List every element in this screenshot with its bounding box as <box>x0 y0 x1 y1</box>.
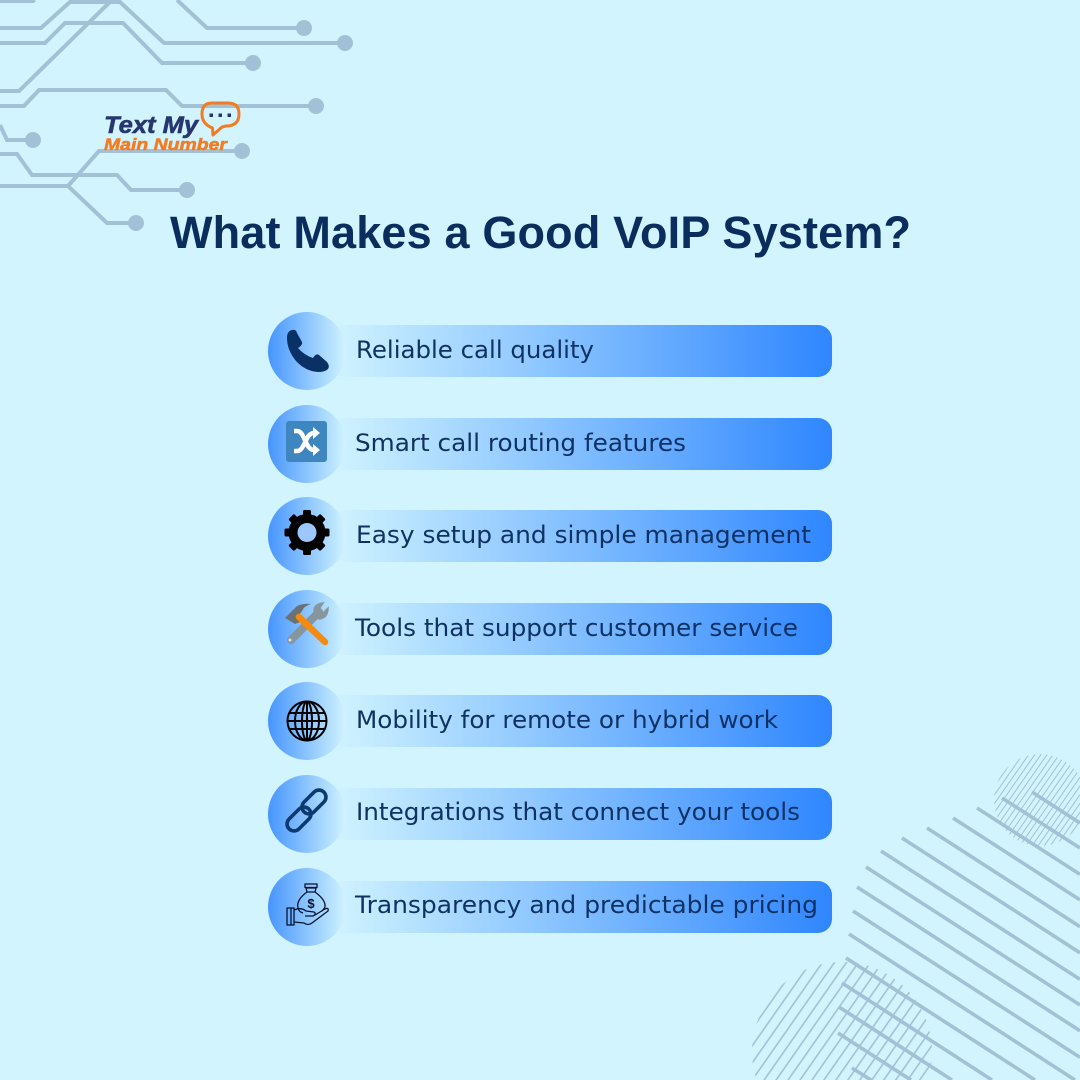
list row: Mobility for remote or hybrid work <box>268 682 832 760</box>
list row: Smart call routing features <box>268 405 832 483</box>
list row: Easy setup and simple management <box>268 497 832 575</box>
icon: phone <box>287 330 329 372</box>
icon: gear <box>284 510 330 555</box>
logo: Text My Main Number: Text My <box>104 112 200 139</box>
icon: shuffle <box>286 421 327 462</box>
list row: Integrations that connect your tools: Integrations that connect your tools <box>356 798 800 826</box>
title: What Makes a Good VoIP System? <box>170 207 911 258</box>
list row: Smart call routing features: Smart call routing features <box>355 429 686 457</box>
logo: Text My Main Number: Main Number <box>104 135 229 154</box>
list row: Mobility for remote or hybrid work: Mobility for remote or hybrid work <box>356 706 778 734</box>
logo: Text My Main Number <box>104 103 239 154</box>
list row: Reliable call quality <box>268 312 832 390</box>
list row: Integrations that connect your tools <box>268 775 832 853</box>
icon: hammer and wrench <box>285 603 328 642</box>
icon: money bag on hand <box>287 884 328 925</box>
list row: Transparency and predictable pricing: Transparency and predictable pricing <box>354 891 818 919</box>
list row: Tools that support customer service <box>268 590 832 668</box>
list row: Transparency and predictable pricing <box>268 868 832 946</box>
list row: Easy setup and simple management: Easy setup and simple management <box>356 521 811 549</box>
list row: Tools that support customer service: Tools that support customer service <box>354 614 798 642</box>
icon: money bag on hand: $ <box>307 896 315 911</box>
icon: chain link <box>284 787 329 834</box>
circuit decoration: top left <box>0 0 353 231</box>
hatch decoration: bottom right <box>752 754 1080 1080</box>
list row: Reliable call quality: Reliable call quality <box>356 336 594 364</box>
icon: globe <box>288 701 327 741</box>
